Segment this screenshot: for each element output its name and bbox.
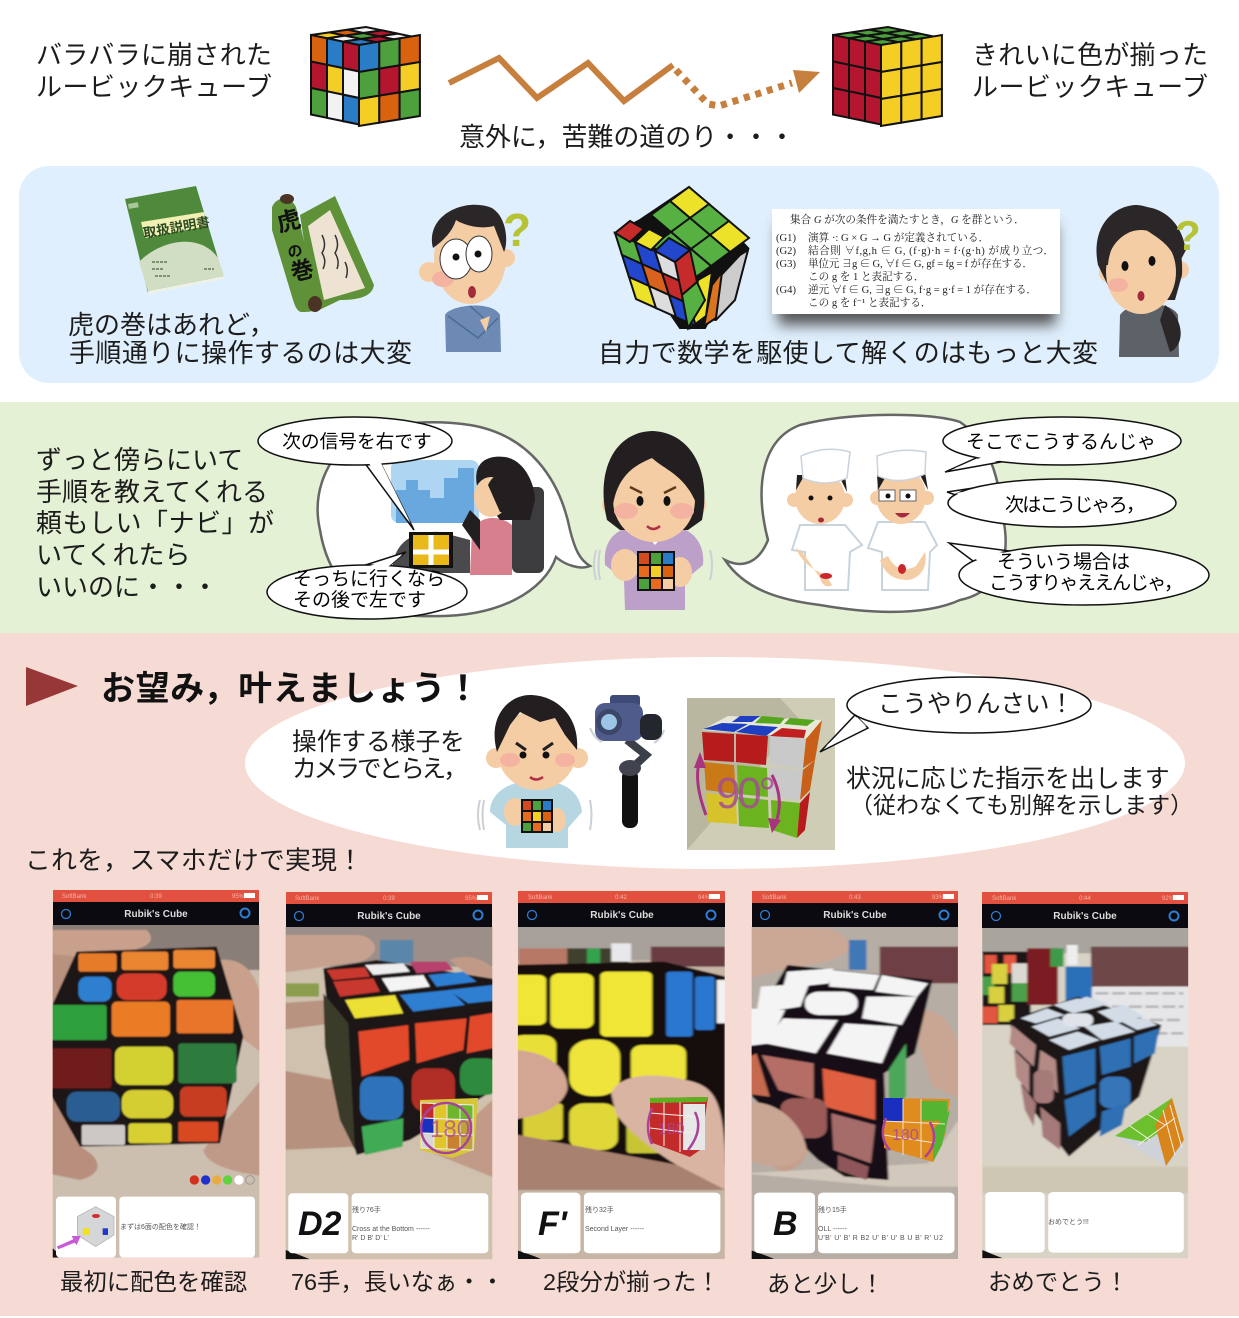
text: navi wish: ずっと傍らにいて <box>36 445 243 475</box>
text: camera capture: カメラでとらえ， <box>292 756 468 783</box>
screenshot 4: B <box>743 891 968 1263</box>
screenshot 2: D2: 95% <box>465 896 478 902</box>
screenshot 2: D2: SoftBank <box>295 896 320 902</box>
icon: scrambled rubik's cube <box>311 27 420 126</box>
screenshot 3: F': 残り32手 <box>585 1205 614 1214</box>
screenshot 3: F': 0:42 <box>615 895 627 901</box>
screenshot 5: congratulations: SoftBank <box>992 896 1017 902</box>
captions under screenshots: あと少し！ <box>767 1271 884 1297</box>
screenshot 2: D2: R' D B' D' L' <box>352 1235 389 1242</box>
text: instructions: 状況に応じた指示を出します <box>846 765 1170 793</box>
text: instructions: （従わなくても別解を示します） <box>850 792 1193 818</box>
captions under screenshots: おめでとう！ <box>988 1269 1128 1295</box>
screenshot 5: congratulations: 0:44 <box>1079 896 1091 902</box>
icon: puzzled man with glasses: ? <box>503 204 531 256</box>
callout: chef line 3: こうすりゃええんじゃ， <box>989 573 1183 594</box>
screenshot 4: B: B <box>773 1205 798 1243</box>
callout: chef line 2 <box>947 479 1176 527</box>
text: navi wish: 頼もしい「ナビ」が <box>36 508 274 538</box>
captions under screenshots: 76手，長いなぁ・・ <box>291 1269 504 1295</box>
screenshot 4: B: 残り15手 <box>818 1205 847 1214</box>
heading: お望み，叶えましょう！ <box>101 670 480 708</box>
screenshot 4: B: 93% <box>932 895 945 901</box>
panel: manual and math are hard <box>19 166 1219 383</box>
text: navi wish: いてくれたら <box>36 540 190 570</box>
figure: group axioms sheet: (G4) <box>776 285 796 296</box>
icon: tiger scroll: 虎 <box>274 206 304 238</box>
icon: puzzled woman: ? <box>1175 212 1201 259</box>
callout: turn left: その後で左です <box>293 589 426 611</box>
text: left caption <box>68 310 412 368</box>
illustration: woman holding cube <box>594 431 712 610</box>
screenshot 1: color check: まずは6面の配色を確認！ <box>120 1222 201 1231</box>
captions under screenshots: 最初に配色を確認 <box>60 1269 247 1295</box>
screenshot 4: B: Rubik's Cube <box>823 910 887 921</box>
figure: group axioms sheet: 集合 G が次の条件を満たすとき，G を群という． <box>790 213 1025 226</box>
arrow: winding path <box>449 58 820 106</box>
screenshot 5: congratulations: 92% <box>1162 896 1175 902</box>
screenshot 2: D2: 残り76手 <box>352 1205 381 1214</box>
screenshot 1: color check: Rubik's Cube <box>124 909 188 920</box>
icon: manual book <box>125 186 224 294</box>
figure: group axioms sheet: (G2) <box>776 246 796 257</box>
text: solved cube caption: ルービックキューブ <box>972 72 1208 102</box>
illustration: two sushi chefs <box>787 449 937 590</box>
figure: group axioms sheet <box>772 209 1060 325</box>
text: navi wish: 手順を教えてくれる <box>36 477 268 507</box>
screenshot 4: B: SoftBank <box>762 895 787 901</box>
icon: solved rubik's cube <box>833 27 942 126</box>
callout: next signal: 次の信号を右です <box>282 431 432 452</box>
callout: chef line 2: 次はこうじゃろ， <box>1005 494 1145 516</box>
figure: group axioms sheet: 結合則 ∀f,g,h ∈ G, (f·g)·h = f·(g·h) が成り立つ． <box>808 244 1054 257</box>
text: camera capture: 操作する様子を <box>292 728 465 756</box>
figure: AR guidance photo: 90° <box>716 769 776 818</box>
AR cube: 180 <box>430 1116 470 1143</box>
background ellipse <box>245 657 1185 869</box>
icon: section triangle <box>26 667 78 706</box>
text: instructions <box>846 765 1193 818</box>
callout: chef line 1: そこでこうするんじゃ <box>966 432 1156 453</box>
text: smartphone only: これを，スマホだけで実現！ <box>25 846 363 875</box>
icon: tiger scroll: の <box>286 242 305 262</box>
figure: group axioms sheet: 演算 ·: G × G → G が定義されている． <box>808 231 989 244</box>
screenshot 3: F' <box>510 891 734 1263</box>
screenshot 2: D2: 0:39 <box>383 896 395 902</box>
figure: group axioms sheet: 単位元 ∃g ∈ G, ∀f ∈ G, gf = fg = f が存在する． <box>808 257 1033 270</box>
speech bubble: chefs <box>725 415 1006 612</box>
screenshot 4: B: U'B' U' B' R B2 U' B' U' B U B' R' U2 <box>818 1235 943 1242</box>
icon: puzzled man with glasses <box>419 204 531 352</box>
screenshot 5: congratulations <box>977 892 1197 1263</box>
figure: group axioms sheet: この g を 1 と表記する． <box>808 270 925 283</box>
illustration: man solving cube <box>478 695 592 848</box>
text: scrambled cube caption: ルービックキューブ <box>36 72 272 102</box>
captions under screenshots: 2段分が揃った！ <box>543 1269 720 1295</box>
screenshot 1: color check <box>47 890 267 1263</box>
screenshot 1: color check: 95% <box>232 894 245 900</box>
text: right caption: 自力で数学を駆使して解くのはもっと大変 <box>598 338 1098 368</box>
AR cube <box>420 1098 478 1158</box>
figure: group axioms sheet: この g を f⁻¹ と表記する． <box>808 296 932 309</box>
screenshot 1: color check: SoftBank <box>62 894 87 900</box>
panel: solution <box>0 633 1239 1316</box>
screenshot 2: D2: D2 <box>298 1205 342 1243</box>
text: left caption: 虎の巻はあれど， <box>68 310 275 340</box>
AR cube <box>648 1097 708 1157</box>
figure: AR guidance photo <box>687 698 835 850</box>
figure: group axioms sheet: (G1) <box>776 233 796 244</box>
callout: turn left <box>267 552 467 619</box>
text: scrambled cube caption: バラバラに崩された <box>36 40 272 70</box>
screenshot 2: D2 <box>280 892 500 1263</box>
icon: tiger scroll: 巻 <box>288 255 317 286</box>
screenshot 4: B: OLL ------ <box>818 1226 848 1233</box>
figure: group axioms sheet: (G3) <box>776 259 796 270</box>
speech bubble: car navigation <box>318 422 590 616</box>
screenshot 2: D2: Cross at the Bottom ------ <box>352 1226 430 1233</box>
callout: next signal <box>258 417 452 530</box>
icon: tiger scroll <box>272 194 374 312</box>
text: left caption: 手順通りに操作するのは大変 <box>69 338 412 368</box>
illustration: camera on gimbal <box>590 695 664 828</box>
icon: twisted rubik's cube <box>615 187 749 328</box>
icon: manual book: 取扱説明書 <box>142 213 211 241</box>
screenshot 4: B: 0:43 <box>849 895 861 901</box>
callout: turn left: そっちに行くなら <box>293 568 445 590</box>
AR cube <box>883 1098 950 1162</box>
figure: group axioms sheet: 逆元 ∀f ∈ G, ∃g ∈ G, f·g = g·f = 1 が存在する． <box>808 283 1037 296</box>
text: navi wish: いいのに・・・ <box>36 572 218 602</box>
AR cube: 180 <box>892 1127 919 1144</box>
text: hard road: 意外に，苦難の道のり・・・ <box>459 122 795 152</box>
screenshot 3: F': 94% <box>698 895 711 901</box>
screenshot 3: F': F' <box>538 1205 569 1243</box>
icon: puzzled woman <box>1096 205 1201 357</box>
screenshot 2: D2: Rubik's Cube <box>357 911 421 922</box>
callout: chef line 3: そういう場合は <box>997 551 1130 573</box>
screenshot 3: F': Second Layer ------ <box>585 1226 645 1233</box>
illustration: driver with navigation <box>391 457 544 575</box>
text: scrambled cube caption <box>36 40 272 102</box>
screenshot 5: congratulations: おめでとう!!! <box>1048 1218 1089 1226</box>
screenshot 3: F': Rubik's Cube <box>590 910 654 921</box>
screenshot 3: F': SoftBank <box>528 895 553 901</box>
callout: do it this way: こうやりんさい！ <box>878 691 1074 718</box>
captions under screenshots <box>60 1269 1128 1297</box>
screenshot 1: color check: 0:39 <box>150 894 162 900</box>
text: solved cube caption <box>972 40 1208 102</box>
panel: navi wish <box>0 402 1239 633</box>
AR cube <box>1115 1098 1184 1167</box>
text: solved cube caption: きれいに色が揃った <box>972 40 1208 70</box>
callout: chef line 3 <box>949 543 1209 605</box>
callout: chef line 1 <box>943 417 1181 472</box>
text: navi wish <box>36 445 274 602</box>
screenshot 5: congratulations: Rubik's Cube <box>1053 911 1117 922</box>
callout: do it this way <box>820 677 1091 752</box>
text: camera capture <box>292 728 468 783</box>
AR cube: 180 <box>658 1121 685 1138</box>
